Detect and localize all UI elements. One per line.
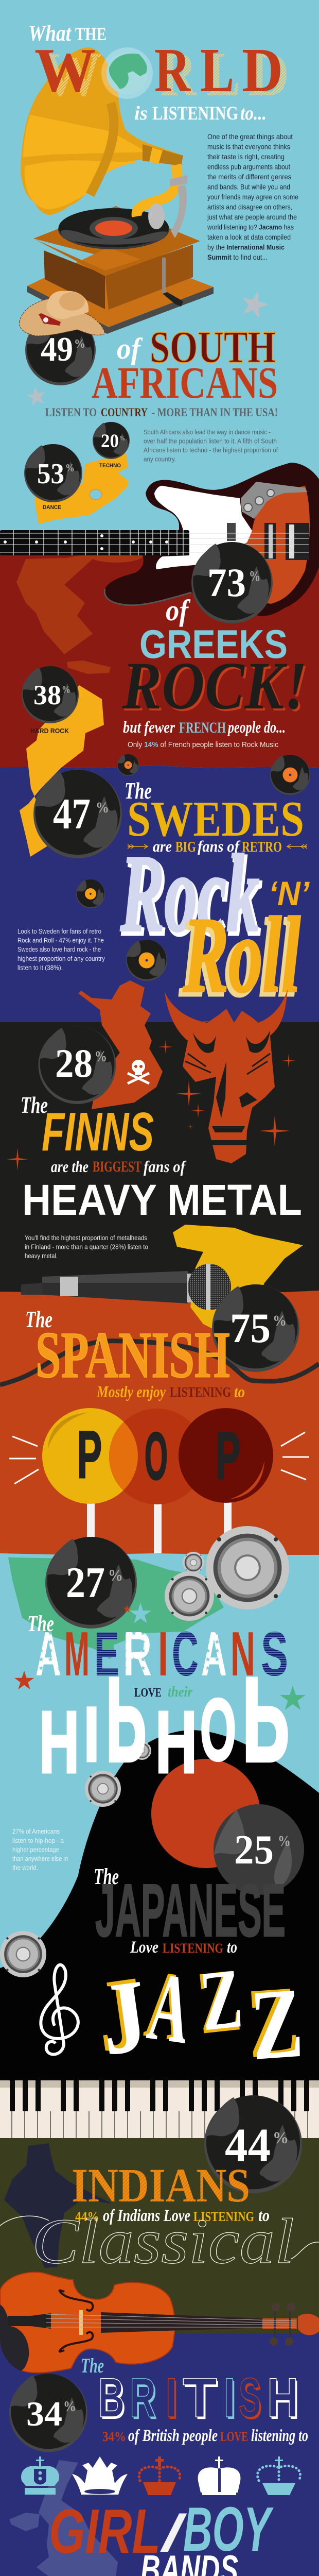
heading: The Swedes: The: [125, 777, 152, 804]
subheading: love their: [134, 1684, 193, 1700]
title: World: W: [34, 36, 96, 105]
illustration: devil face: [165, 989, 288, 1163]
stat: 44 percent: %: [273, 2129, 289, 2147]
text block: Sweden: listen to it (38%).: [17, 963, 63, 972]
title: World: W: [41, 40, 102, 109]
panel: Greece rock: [0, 463, 319, 749]
heading: of South Africans: [92, 323, 278, 408]
stat: 44 percent: [204, 2095, 302, 2193]
heading: Hip Hop: O: [200, 1681, 236, 1779]
heading: Jazz: A: [139, 1950, 196, 2062]
subheading: mostly enjoy: [96, 1382, 245, 1401]
subheading: biggest fans: [51, 1157, 187, 1176]
globe letter: [101, 47, 153, 99]
title: World: R: [161, 40, 198, 109]
heading: Hip Hop: [39, 1652, 290, 1791]
intro text: world listening to? Jacamo has: [207, 223, 294, 231]
title: is listening to: is: [134, 103, 148, 124]
heading: The British: I: [165, 2366, 178, 2429]
text block: South Africans dance: over half the population listen to it. A fifth of South: [144, 437, 277, 445]
text block: South Africans dance: [144, 428, 278, 463]
heading: Heavy Metal: HEAVY METAL: [22, 1176, 302, 1224]
subheading: love listening to: Love: [130, 1938, 158, 1957]
heading: The Spanish: SPANISH: [36, 1318, 230, 1392]
intro text: One of the great things about: [207, 132, 293, 141]
intro text: artists and disagree on others,: [207, 203, 292, 211]
heading: of South Africans: of: [117, 332, 143, 365]
subheading: fans of retro: [128, 837, 307, 855]
heading: of South Africans: AFRICANS: [92, 358, 278, 408]
subheading: love listening: LISTENING: [193, 2209, 254, 2224]
stat: 25 percent: [214, 1804, 304, 1895]
subheading: biggest fans: BIGGEST: [93, 1158, 141, 1175]
text block: Americans: listen to hip-hop - a: [12, 1837, 64, 1844]
heading: Girl/Boy Bands: /: [160, 2504, 187, 2562]
subheading: love listening: of British people: [128, 2427, 218, 2445]
subheading: biggest fans: are the: [51, 1157, 88, 1176]
subheading: love their: LOVE: [134, 1686, 162, 1700]
illustration: violin: [0, 2272, 319, 2373]
title: World: D: [242, 36, 283, 105]
heading: Jazz: J: [88, 1955, 150, 2074]
text block: French rock: Only 14% of French people listen to Rock Music: [128, 740, 278, 749]
heading: The British: S: [240, 2368, 262, 2431]
stat: 27 percent: %: [108, 1566, 123, 1584]
heading: Rock n Roll: [120, 832, 310, 1018]
title: What the: What: [28, 21, 72, 46]
subheading: love listening: to: [258, 2207, 270, 2225]
heading: The British: S: [239, 2366, 261, 2429]
panel: Finland heavy metal: [6, 980, 302, 1260]
heading: of Greeks rock: GREEKS: [139, 621, 288, 667]
heading: The Americans: S: [261, 1619, 288, 1689]
subheading: fans of retro: BIG: [175, 839, 196, 855]
heading: Indians: INDIANS: [72, 2159, 250, 2212]
text block: Finland: You'll find the highest proportion of metalheads: [25, 1234, 147, 1242]
map: Finland: [78, 980, 163, 1109]
intro text: music is that everyone thinks: [207, 142, 290, 150]
subheading: fans of retro: fans of: [198, 837, 240, 855]
heading: The Americans: I: [158, 1619, 168, 1689]
stat: 28 percent: 28: [55, 1041, 93, 1086]
heading: The Americans: N: [231, 1619, 255, 1689]
panel: Spain pop: [0, 1225, 319, 1553]
illustration: bass guitar: [0, 463, 319, 616]
heading: Jazz: J: [93, 1958, 155, 2077]
text block: South Africans dance: Africans listen to techno - the highest proportion of: [144, 446, 278, 454]
stat: 34 percent: %: [63, 2399, 76, 2415]
intro text: just what are people around the: [207, 213, 297, 221]
stat: 49 percent: %: [74, 337, 85, 351]
panel: title and gramophone: [21, 21, 298, 334]
heading: Jazz: Z: [192, 1949, 246, 2053]
illustration: pop lollipops: P: [77, 1417, 102, 1492]
heading: The British: R: [130, 2366, 156, 2429]
heading: The Spanish: [25, 1306, 230, 1392]
icon: speaker: [0, 1931, 46, 1977]
title: World: L: [200, 36, 234, 105]
stat: 47 percent: [33, 770, 122, 858]
stat: 28 percent: %: [95, 1048, 107, 1065]
heading: The British: [81, 2354, 300, 2431]
subheading: fewer French: people do...: [227, 718, 286, 736]
intro text: your friends may agree on some: [207, 193, 298, 201]
intro text: by the International Music: [207, 243, 285, 251]
map: South Africa: [34, 453, 128, 524]
text block: South Africans dance: any country.: [144, 455, 176, 463]
stat: 27 percent: [45, 1537, 137, 1629]
subheading: fans of retro: are: [153, 837, 172, 855]
text block: Sweden: [17, 927, 105, 972]
heading: Jazz: Z: [243, 1965, 303, 2079]
subheading: love listening: of Indians Love: [103, 2207, 190, 2225]
gramophone illustration: [21, 47, 214, 334]
heading: The British: H: [267, 2366, 298, 2429]
subheading: fewer French: but fewer: [123, 718, 175, 736]
icon: skull and crossbones: [128, 1060, 149, 1083]
subheading: listen to country: - MORE THAN IN THE USA!: [152, 406, 278, 419]
heading: of South Africans: SOUTH: [150, 323, 276, 372]
black record and label: [151, 1759, 260, 1868]
stat: 44 percent: 44: [225, 2119, 271, 2172]
icon: speakers: [85, 1526, 289, 1807]
title: World: D: [248, 40, 289, 109]
panel: USA hip hop: [8, 1526, 306, 1871]
heading: Rock n Roll: ‘N’: [269, 874, 310, 912]
text block: Sweden: highest proportion of any country: [17, 955, 105, 962]
text block: Americans: higher percentage: [12, 1845, 59, 1854]
heading: The Americans: R: [123, 1619, 152, 1689]
illustration: pop lollipops: P: [216, 1418, 240, 1493]
heading: of Greeks rock: [121, 594, 309, 725]
heading: The Americans: A: [201, 1619, 227, 1689]
heading: Classical: Classical: [32, 2206, 294, 2277]
map: Greece: [16, 554, 144, 674]
stat: 34 percent: [9, 2374, 87, 2452]
title: World: R: [154, 36, 191, 105]
icon: stars: [14, 1603, 306, 1710]
text block: Finland: [25, 1234, 148, 1260]
illustration: pop lollipops: [9, 1408, 309, 1553]
stat: 38 percent hard rock: HARD ROCK: [30, 727, 69, 735]
stat: 38 percent hard rock: [22, 666, 79, 735]
stat: 49 percent: 49: [41, 330, 73, 368]
heading: The British: R: [131, 2368, 157, 2431]
title: What the: [28, 21, 107, 46]
title: What the: THE: [75, 24, 107, 44]
intro text: taken a look at data compiled: [207, 233, 291, 241]
intro text: the merits of different genres: [207, 173, 291, 181]
heading: The Americans: M: [64, 1619, 90, 1689]
panel: Britain bands: [0, 2354, 308, 2576]
map: Spain: [173, 1225, 303, 1329]
stat: 20 percent techno: TECHNO: [99, 463, 121, 469]
stat: 73 percent: %: [249, 568, 260, 585]
subheading: listen to country: LISTEN TO: [45, 406, 97, 419]
map: India: [4, 2143, 112, 2268]
stat: 73 percent: 73: [207, 560, 246, 605]
stat: 34 percent: 34: [26, 2394, 62, 2433]
title: is listening to: to...: [240, 103, 267, 124]
heading: Girl/Boy Bands: BOY: [183, 2494, 274, 2564]
subheading: love listening: [75, 2207, 270, 2225]
stat label: 75: %: [273, 1312, 287, 1329]
map: USA: [8, 1557, 224, 1659]
heading: of Greeks rock: of: [166, 594, 191, 627]
heading: The Finns: FINNS: [42, 1101, 154, 1162]
text block: Americans: 27% of Americans: [12, 1827, 60, 1835]
heading: Hip Hop: P: [105, 1652, 147, 1788]
subheading: love listening: 34%: [102, 2429, 126, 2444]
heading: The Americans: The: [27, 1611, 54, 1636]
stat: 38 percent hard rock: 38: [33, 680, 61, 710]
heading: Girl/Boy Bands: GIRL: [49, 2496, 161, 2566]
cable: [0, 1341, 319, 1385]
heading: The British: H: [269, 2368, 300, 2431]
text block: Americans: [12, 1827, 68, 1871]
subheading: fans of retro: RETRO: [242, 839, 282, 855]
title: World: [34, 36, 289, 109]
subheading: mostly enjoy: LISTENING: [170, 1384, 231, 1400]
heading: Hip Hop: H: [39, 1693, 79, 1791]
text block: Americans: than anywhere else in: [12, 1855, 68, 1862]
stat: 20 percent techno: [93, 422, 130, 469]
stat: 28 percent: [38, 1026, 116, 1104]
heading: The British: T: [184, 2368, 219, 2431]
heading: The Americans: A: [36, 1619, 61, 1689]
subheading: fewer French: [123, 718, 286, 736]
subheading: mostly enjoy: to: [234, 1382, 245, 1401]
heading: The Americans: [27, 1611, 288, 1689]
icon: sheriff stars: [25, 287, 271, 406]
heading: The Spanish: The: [25, 1306, 52, 1332]
text block: Sweden: Swedes also love hard rock - the: [17, 945, 101, 953]
stat: 53 percent dance: [24, 444, 82, 511]
map: Sweden: [20, 685, 104, 857]
subheading: love listening: LOVE: [220, 2429, 248, 2444]
stat: 20 percent techno: %: [119, 435, 125, 443]
subheading: love listening to: LISTENING: [163, 1941, 223, 1956]
intro text: Summit to find out...: [207, 253, 268, 261]
intro text: [207, 132, 298, 261]
subheading: listen to country: COUNTRY: [101, 406, 148, 419]
stat: 49 percent: [20, 291, 104, 385]
text block: South Africans dance: South Africans also lead the way in dance music -: [144, 428, 271, 436]
heading: Jazz: A: [143, 1952, 197, 2065]
stat: 25 percent: 25: [234, 1826, 274, 1873]
heading: The Finns: [21, 1092, 154, 1162]
stat: 53 percent dance: 53: [37, 458, 64, 490]
stat: 47 percent: %: [96, 799, 109, 816]
illustration: piano keys: [0, 2080, 319, 2138]
heading: The British: I: [223, 2366, 236, 2429]
panel: Sweden rock n roll: [17, 666, 310, 1018]
subheading: fewer French: FRENCH: [179, 719, 226, 736]
panel: South Africa country: [20, 287, 278, 524]
icon: cowboy hat: [20, 291, 104, 336]
heading: The British: I: [167, 2368, 179, 2431]
subheading: love their: their: [168, 1684, 193, 1700]
illustration: pop lollipops: O: [145, 1418, 168, 1494]
heading: Jazz: Z: [196, 1951, 246, 2048]
text block: Sweden: Look to Sweden for fans of retro: [17, 927, 101, 935]
heading: The British: B: [98, 2366, 125, 2429]
icon: treble clef: [41, 1965, 78, 2055]
text block: Sweden: Rock and Roll - 47% enjoy it. The: [17, 937, 104, 944]
stat: 25 percent: %: [278, 1833, 291, 1850]
stat: 27 percent: 27: [66, 1558, 105, 1607]
subheading: love listening to: to: [227, 1938, 237, 1957]
intro text: their taste is right, creating: [207, 152, 285, 161]
text block: Finland: in Finland - more than a quarter (28%) listen to: [25, 1243, 148, 1251]
text block: Americans: the world.: [12, 1864, 38, 1871]
stat label: 75: 75: [230, 1304, 271, 1351]
heading: The British: The: [81, 2354, 104, 2377]
stat: 75 percent: [212, 1284, 299, 1372]
stat: 38 percent hard rock: %: [62, 684, 70, 696]
title: is listening to: LISTENING: [152, 103, 238, 124]
heading: The Japanese: The: [94, 1864, 119, 1889]
heading: Girl/Boy Bands: [49, 2494, 274, 2576]
heading: The British: T: [183, 2366, 217, 2429]
heading: Hip Hop: I: [84, 1691, 99, 1777]
intro text: endless pub arguments about: [207, 163, 290, 171]
icon: sparkles: [6, 1040, 296, 1171]
subheading: listen to country: [45, 406, 278, 419]
title: World: L: [206, 40, 240, 109]
stat: 73 percent: [191, 542, 273, 623]
heading: Hip Hop: H: [155, 1693, 197, 1791]
stat: 47 percent: 47: [53, 790, 91, 838]
heading: Jazz: [88, 1949, 306, 2081]
subheading: love listening to: [130, 1938, 237, 1957]
intro text: and bands. But while you and: [207, 182, 290, 191]
icon: small records: [76, 754, 310, 981]
icon: crowns: [21, 2456, 300, 2495]
heading: The British: I: [225, 2368, 237, 2431]
map: United Kingdom: [9, 2460, 118, 2576]
subheading: biggest fans: fans of: [144, 1157, 187, 1176]
panel: India classical: [0, 2095, 319, 2373]
illustration: microphone: [21, 1264, 231, 1310]
panel: Japan jazz: [0, 1804, 319, 2138]
stat: 53 percent dance: %: [65, 462, 75, 474]
stat: 53 percent dance: DANCE: [43, 504, 61, 511]
heading: The Americans: E: [94, 1619, 119, 1689]
heading: The Americans: C: [172, 1619, 199, 1689]
subheading: mostly enjoy: Mostly enjoy: [96, 1382, 166, 1401]
subheading: love listening: [102, 2427, 308, 2445]
heading: The British: B: [100, 2368, 126, 2431]
stat: 20 percent techno: 20: [101, 431, 119, 452]
text block: Finland: heavy metal.: [25, 1252, 58, 1260]
subheading: love listening: 44%: [75, 2209, 99, 2224]
heading: The Finns: The: [21, 1092, 48, 1118]
